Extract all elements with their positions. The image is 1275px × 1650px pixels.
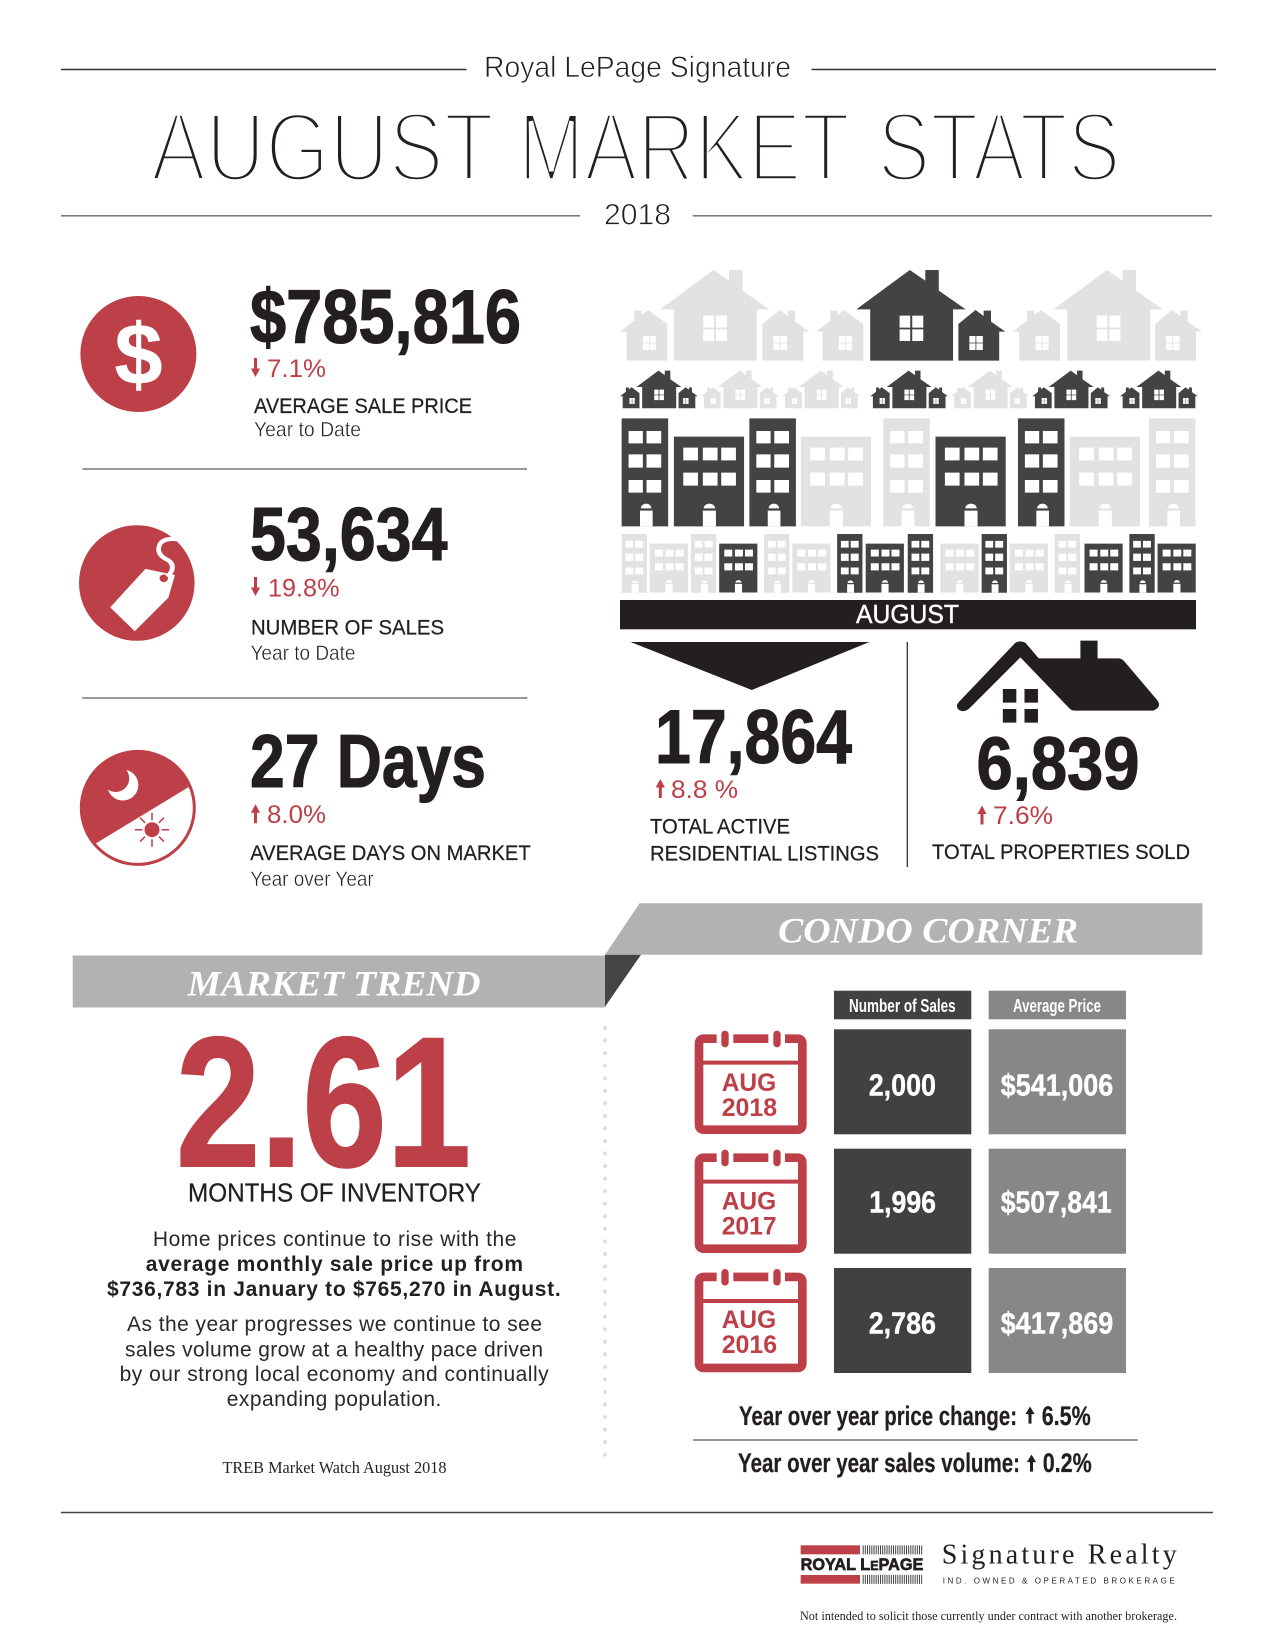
price 2016 bbox=[989, 1268, 1126, 1373]
sales 2017 bbox=[834, 1149, 971, 1254]
icon: down pointer bbox=[631, 642, 869, 690]
market trend commentary: by our strong local economy and continually bbox=[120, 1363, 549, 1386]
column header: average price bbox=[989, 991, 1126, 1019]
row: august 2016 bbox=[699, 1268, 1126, 1373]
change: 7.6% bbox=[993, 802, 1053, 830]
market trend commentary: Home prices continue to rise with the bbox=[153, 1228, 516, 1251]
market trend commentary bbox=[107, 1228, 561, 1411]
change: 19.8% bbox=[268, 574, 340, 602]
stat: average days on market bbox=[81, 719, 531, 891]
calendar icon 2016 bbox=[699, 1273, 802, 1368]
row: august 2017 bbox=[699, 1149, 1126, 1254]
sublabel: Year to Date bbox=[254, 418, 361, 442]
row: august 2018 bbox=[699, 1029, 1126, 1134]
row: small houses bbox=[620, 371, 1198, 408]
caption: MONTHS OF INVENTORY bbox=[188, 1177, 481, 1207]
market trend commentary: expanding population. bbox=[227, 1388, 441, 1411]
price 2016: $417,869 bbox=[1001, 1306, 1113, 1340]
disclaimer: Not intended to solicit those currently under contract with another brokerage. bbox=[800, 1609, 1177, 1623]
icon: dollar circle: $ bbox=[114, 307, 162, 403]
column header: number of sales bbox=[834, 991, 971, 1019]
title: MARKET bbox=[518, 92, 850, 202]
royal lepage mark bbox=[801, 1545, 923, 1584]
row: small buildings bbox=[622, 534, 1196, 593]
year over year sales volume: Year over year sales volume: bbox=[738, 1448, 1020, 1478]
label: TOTAL ACTIVE bbox=[650, 816, 790, 838]
change: 8.0% bbox=[267, 801, 326, 829]
august banner bbox=[620, 600, 1196, 629]
months of inventory bbox=[176, 1000, 481, 1207]
icon: price tag circle bbox=[79, 525, 195, 641]
row: large buildings bbox=[622, 418, 1196, 526]
sublabel: Year to Date bbox=[250, 642, 356, 665]
calendar icon 2017 bbox=[699, 1153, 802, 1249]
stat: average sale price bbox=[80, 275, 521, 442]
calendar icon 2018: AUG bbox=[722, 1069, 776, 1097]
label: NUMBER OF SALES bbox=[251, 616, 444, 640]
condo corner banner: CONDO CORNER bbox=[778, 910, 1078, 950]
label: TOTAL PROPERTIES SOLD bbox=[932, 841, 1190, 864]
value: 27 Days bbox=[250, 719, 486, 803]
price 2017 bbox=[989, 1149, 1126, 1254]
label: AVERAGE DAYS ON MARKET bbox=[250, 842, 531, 865]
icon: dollar circle bbox=[80, 296, 196, 412]
calendar icon 2017: 2017 bbox=[722, 1213, 777, 1241]
change: 7.1% bbox=[267, 355, 326, 383]
calendar icon 2018: 2018 bbox=[722, 1094, 777, 1122]
brokerage line: IND. OWNED & OPERATED BROKERAGE bbox=[943, 1576, 1175, 1585]
sublabel: Year over Year bbox=[250, 868, 374, 891]
market trend commentary: As the year progresses we continue to see bbox=[127, 1313, 542, 1336]
price 2018: $541,006 bbox=[1001, 1068, 1113, 1102]
title: STATS bbox=[878, 92, 1120, 202]
market trend banner: MARKET TREND bbox=[186, 964, 481, 1004]
sales 2016 bbox=[834, 1268, 971, 1373]
change: 8.8 % bbox=[671, 776, 738, 804]
value: 17,864 bbox=[655, 695, 852, 780]
header bbox=[61, 51, 1216, 231]
row: large houses bbox=[620, 270, 1202, 361]
source note: TREB Market Watch August 2018 bbox=[222, 1458, 446, 1477]
august banner: AUGUST bbox=[856, 601, 959, 629]
royal lepage mark: ROYAL LEPAGE bbox=[801, 1555, 923, 1574]
stat: total active residential listings bbox=[631, 642, 879, 866]
price 2018 bbox=[989, 1029, 1126, 1134]
icon: house roof bbox=[957, 641, 1159, 723]
calendar icon 2016: 2016 bbox=[722, 1331, 777, 1359]
footer logo bbox=[801, 1540, 1177, 1585]
sales 2018 bbox=[834, 1029, 971, 1134]
column header: average price: Average Price bbox=[1013, 996, 1101, 1016]
value: $785,816 bbox=[250, 275, 521, 360]
value: 53,634 bbox=[250, 492, 448, 576]
big number: 2.61 bbox=[176, 1000, 471, 1206]
market trend commentary: $736,783 in January to $765,270 in August. bbox=[107, 1278, 561, 1301]
brand line: Royal LePage Signature bbox=[484, 51, 791, 84]
neighbourhood pictogram bbox=[620, 270, 1202, 593]
label second line: RESIDENTIAL LISTINGS bbox=[650, 843, 879, 866]
condo corner banner bbox=[605, 903, 1202, 955]
year over year price change: Year over year price change: bbox=[739, 1401, 1017, 1431]
title bbox=[151, 92, 1120, 202]
calendar icon 2017: AUG bbox=[722, 1187, 776, 1215]
label: AVERAGE SALE PRICE bbox=[254, 395, 472, 418]
title: AUGUST bbox=[151, 92, 494, 202]
sales 2016: 2,786 bbox=[869, 1306, 936, 1340]
signature realty name: Signature Realty bbox=[942, 1540, 1177, 1570]
calendar icon 2016: AUG bbox=[722, 1306, 776, 1334]
value: 6,839 bbox=[976, 722, 1140, 805]
market trend commentary: sales volume grow at a healthy pace driven bbox=[125, 1339, 543, 1362]
sales 2018: 2,000 bbox=[869, 1068, 936, 1102]
market trend commentary: average monthly sale price up from bbox=[146, 1253, 523, 1276]
column header: number of sales: Number of Sales bbox=[849, 996, 956, 1016]
price 2017: $507,841 bbox=[1001, 1184, 1112, 1220]
condo table bbox=[699, 991, 1126, 1373]
market trend banner bbox=[73, 955, 641, 1008]
icon: day and night circle bbox=[81, 751, 194, 864]
stat: total properties sold bbox=[932, 641, 1190, 864]
sales 2017: 1,996 bbox=[869, 1184, 936, 1220]
year over year price change: 6.5% bbox=[1042, 1401, 1091, 1431]
year over year sales volume: 0.2% bbox=[1043, 1448, 1092, 1478]
year: 2018 bbox=[604, 198, 671, 231]
calendar icon 2018 bbox=[699, 1034, 802, 1130]
stat: number of sales bbox=[79, 492, 448, 665]
